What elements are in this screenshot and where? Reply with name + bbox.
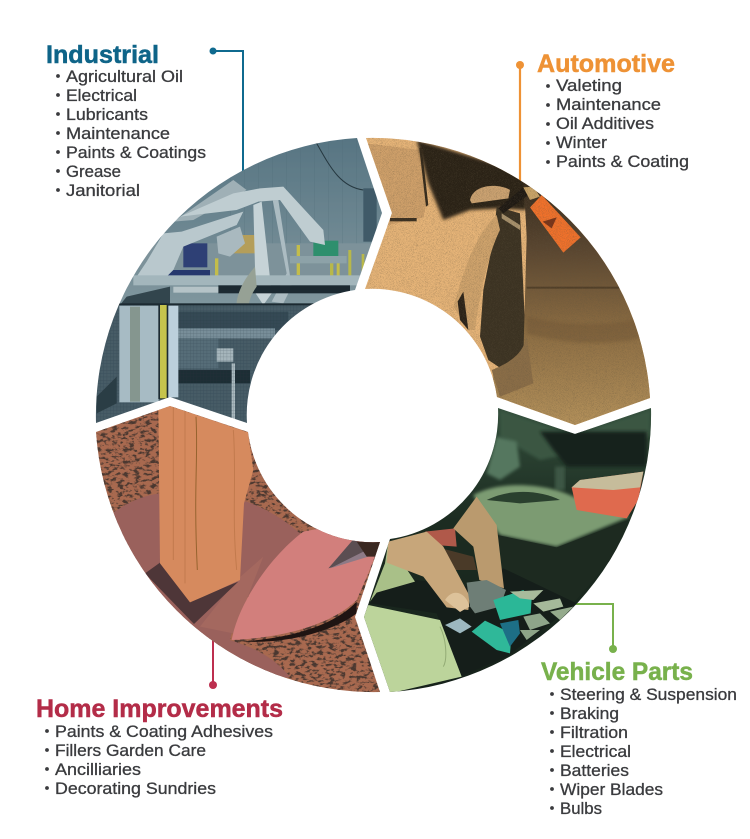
list: vehicle parts items: Steering & Suspension	[560, 686, 737, 704]
list: automotive items: Winter	[556, 134, 608, 152]
list: industrial items: Maintenance	[66, 125, 170, 143]
connector: home improvements	[209, 640, 217, 689]
list: industrial items: Paints & Coatings	[66, 144, 206, 162]
list: home improvement items: Ancilliaries	[55, 761, 141, 779]
heading: Automotive: Automotive	[537, 50, 675, 78]
donut segment: vehicle parts photo	[360, 400, 660, 700]
text block: industrial	[46, 41, 206, 200]
list: home improvement items: Paints & Coating Adhesives	[55, 723, 273, 741]
text block: automotive	[537, 50, 689, 171]
donut segment: automotive photo	[360, 130, 660, 430]
list: automotive items: Oil Additives	[556, 115, 654, 133]
text block: home improvements	[36, 695, 283, 798]
list: vehicle parts items: Wiper Blades	[560, 781, 663, 799]
list: industrial items: Electrical	[66, 87, 137, 105]
list: industrial items: Janitorial	[66, 182, 140, 200]
connector: vehicle parts	[570, 604, 617, 653]
connector: industrial	[210, 48, 243, 175]
list: home improvement items: Fillers Garden Care	[55, 742, 206, 760]
list: industrial items: Grease	[66, 163, 121, 181]
list: vehicle parts items: Electrical	[560, 743, 631, 761]
list: automotive items: Maintenance	[556, 96, 661, 114]
list: vehicle parts items	[550, 686, 737, 818]
list: home improvement items	[45, 723, 273, 798]
list: automotive items: Paints & Coating	[556, 153, 689, 171]
heading: Home Improvements: Home Improvements	[36, 695, 283, 723]
list: industrial items: Lubricants	[66, 106, 148, 124]
heading: Industrial: Industrial	[46, 41, 159, 69]
donut segment: home improvements photo	[90, 400, 390, 700]
list: vehicle parts items: Batteries	[560, 762, 629, 780]
list: industrial items: Agricultural Oil	[66, 68, 183, 86]
list: home improvement items: Decorating Sundries	[55, 780, 216, 798]
list: vehicle parts items: Bulbs	[560, 800, 602, 818]
list: automotive items: Valeting	[556, 77, 622, 95]
list: industrial items	[56, 68, 206, 200]
connector: automotive	[516, 61, 524, 182]
donut segment: industrial photo	[90, 130, 383, 430]
list: vehicle parts items: Filtration	[560, 724, 628, 742]
heading: Vehicle Parts: Vehicle Parts	[541, 658, 693, 686]
list: vehicle parts items: Braking	[560, 705, 619, 723]
text block: vehicle parts	[541, 658, 737, 818]
list: automotive items	[546, 77, 689, 171]
